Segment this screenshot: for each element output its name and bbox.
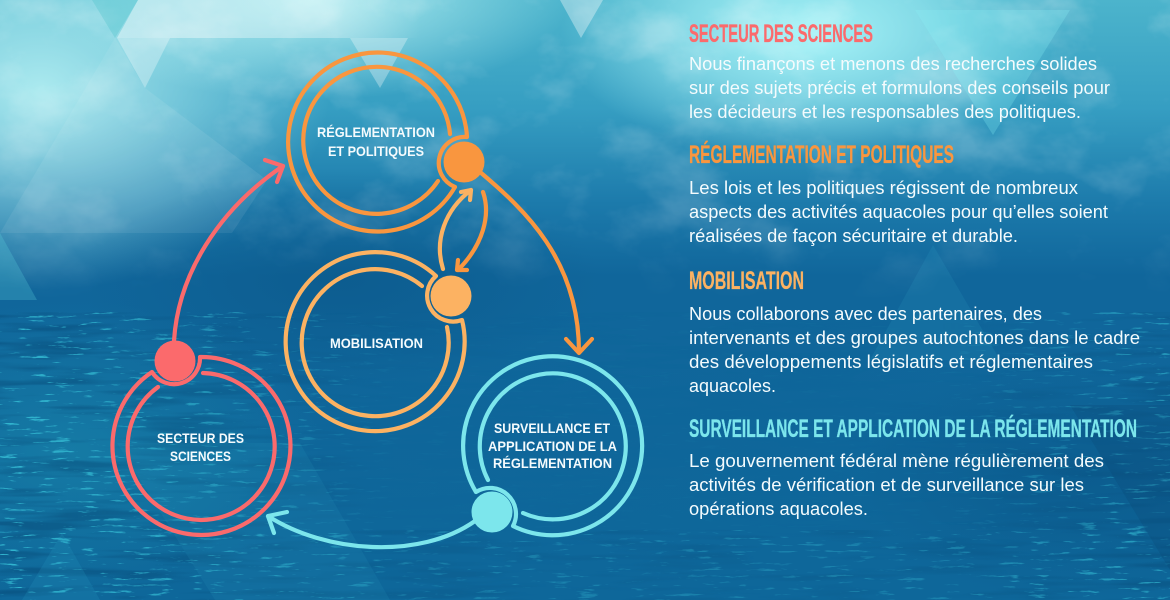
heading: mobilisation: MOBILISATION (689, 267, 804, 295)
text block: mobilisation: Nous collaborons avec des partenaires, des (689, 303, 1042, 324)
text block: monitoring and enforcement (689, 414, 1137, 519)
text block: science sector: sur des sujets précis et formulons des conseils pour (689, 77, 1110, 98)
ring: monitoring and enforcement (463, 356, 642, 535)
text block: monitoring and enforcement: opérations aquacoles. (689, 498, 868, 519)
ring: monitoring and enforcement: APPLICATION DE LA (488, 438, 617, 454)
ring: regulation and policies: RÉGLEMENTATION (317, 124, 435, 140)
heading: science sector: SECTEUR DES SCIENCES (689, 20, 873, 48)
text block: mobilisation: intervenants et des groupes autochtones dans le cadre (689, 327, 1140, 348)
ring: science sector: SECTEUR DES (157, 430, 244, 446)
ring: mobilisation (286, 252, 472, 431)
arrow: regulation to mobilisation (457, 192, 486, 270)
text block: science sector: les décideurs et les responsables des politiques. (689, 101, 1081, 122)
ring: regulation and policies: ET POLITIQUES (328, 143, 424, 159)
text block: science sector: Nous finançons et menons des recherches solides (689, 53, 1097, 74)
ring: monitoring and enforcement: RÉGLEMENTATION (493, 455, 612, 471)
text block: regulation and policies: Les lois et les politiques régissent de nombreux (689, 177, 1079, 198)
ring: monitoring and enforcement: SURVEILLANCE ET (494, 420, 610, 436)
panel: cycle diagram (112, 52, 642, 547)
text block: monitoring and enforcement: Le gouvernement fédéral mène régulièrement des (689, 450, 1104, 471)
arrow: mobilisation to regulation (440, 190, 471, 269)
ring: regulation and policies (288, 52, 484, 231)
arrow: sciences to regulation (174, 160, 283, 341)
text block: regulation and policies: réalisées de façon sécuritaire et durable. (689, 225, 1018, 246)
ring: science sector (112, 340, 290, 535)
text block: mobilisation: des développements législatifs et réglementaires (689, 351, 1093, 372)
heading: regulation and policies: RÉGLEMENTATION ET POLITIQUES (689, 140, 954, 169)
text block: regulation and policies (689, 140, 1108, 246)
text block: mobilisation (689, 267, 1140, 396)
arrow: surveillance to sciences (268, 512, 475, 547)
arrow: regulation to surveillance (480, 172, 592, 353)
ring: science sector: SCIENCES (170, 448, 231, 464)
text block: monitoring and enforcement: activités de vérification et de surveillance sur les (689, 474, 1084, 495)
text block: science sector (689, 20, 1110, 122)
text block: regulation and policies: aspects des activités aquacoles pour qu’elles soient (689, 201, 1108, 222)
ring: mobilisation: MOBILISATION (330, 335, 423, 351)
text block: mobilisation: aquacoles. (689, 375, 776, 396)
